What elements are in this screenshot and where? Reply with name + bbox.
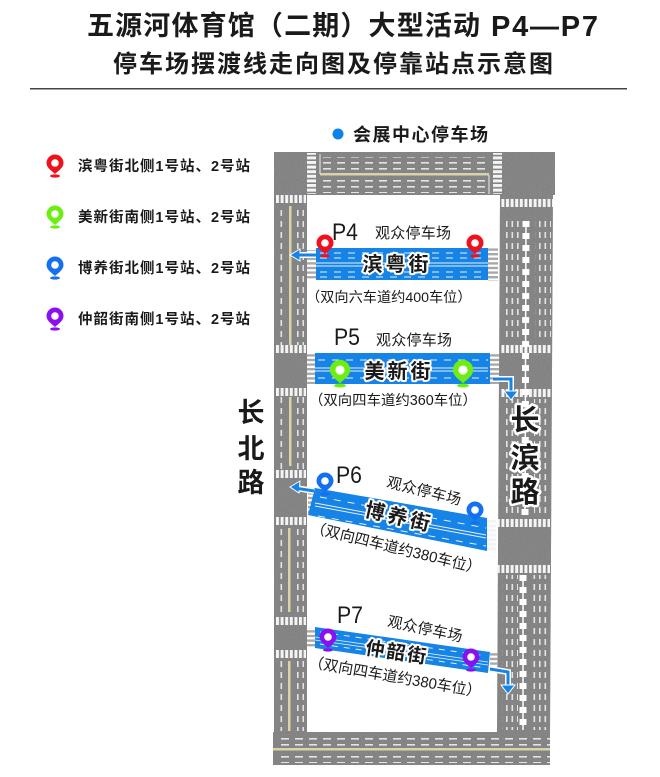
label: P5 capacity: （双向四车道约360车位） <box>309 392 477 409</box>
pin: P7 station 2 <box>462 648 480 672</box>
left road crosswalks <box>275 195 306 658</box>
street: 美新街 P5 <box>307 353 499 384</box>
street name: 美新街: 美新街 <box>364 360 434 383</box>
street name: 仲韶街: 仲韶街 <box>364 637 430 669</box>
legend item: green stop: 美新街南侧1号站、2号站 <box>78 208 250 226</box>
right road crosswalks <box>498 199 553 573</box>
street name: 滨粤街: 滨粤街 <box>362 252 432 276</box>
pin: P7 station 1 <box>320 628 336 652</box>
pin: P6 station 2 <box>466 502 484 525</box>
legend: stops <box>46 154 250 331</box>
bottom road markings <box>275 737 550 746</box>
legend item: purple stop <box>46 308 250 331</box>
pin: P6 station 1 <box>316 472 334 496</box>
label: P5: P5 <box>334 324 360 351</box>
title: main heading: P4—P7 <box>491 11 598 43</box>
street: 博养街 P6 <box>308 488 496 551</box>
road surfaces <box>273 152 555 765</box>
legend item: green stop <box>46 206 250 229</box>
left road lane markings <box>278 205 304 731</box>
arrow: P7 to 长滨路 <box>490 669 515 694</box>
legend item: purple stop: 仲韶街南侧1号站、2号站 <box>78 310 250 328</box>
road network <box>273 152 555 765</box>
legend item: red stop: 滨粤街北侧1号站、2号站 <box>78 157 250 175</box>
road name: 长北路: 路 <box>238 468 264 498</box>
right road lane markings <box>502 216 551 730</box>
title: main heading: 五源河体育馆（二期）大型活动 <box>87 11 480 41</box>
arrow: P5 to 长滨路 <box>493 379 518 400</box>
arrow: P4 westbound <box>290 249 316 261</box>
label: P5 spectator parking: 观众停车场 <box>376 332 452 349</box>
label: P4 capacity: （双向六车道约400车位） <box>306 289 472 306</box>
label: P6: P6 <box>336 462 362 489</box>
stop pins on map <box>316 234 484 672</box>
subtitle: 停车场摆渡线走向图及停靠站点示意图 <box>113 50 553 78</box>
pin: P5 station 2 <box>453 360 473 388</box>
pin: P5 station 1 <box>330 360 350 388</box>
road name: 长滨路: 路 <box>510 476 540 509</box>
label: P4: P4 <box>332 219 358 246</box>
street: 滨粤街 P4 <box>307 248 498 281</box>
road name: 长滨路: 长 <box>510 404 540 437</box>
pin: P4 station 1 <box>316 234 334 258</box>
road name: 长滨路: 滨 <box>510 442 540 475</box>
label: P6 capacity: （双向四车道约380车位） <box>309 519 483 578</box>
road name: 长北路: 北 <box>238 434 264 464</box>
arrow: P6 westbound <box>290 481 314 493</box>
street name: 博养街: 博养街 <box>363 498 435 536</box>
label: P6 spectator parking: 观众停车场 <box>385 474 463 509</box>
pin: P4 station 2 <box>466 234 484 258</box>
label: P7: P7 <box>337 602 363 629</box>
label: P7 capacity: （双向四车道约380车位） <box>307 654 483 701</box>
label: P4 spectator parking: 观众停车场 <box>375 225 451 242</box>
legend item: red stop <box>46 154 250 178</box>
label: P7 spectator parking: 观众停车场 <box>386 613 464 646</box>
street: 仲韶街 P7 <box>307 627 498 673</box>
venue label: exhibition centre car park: 会展中心停车场 <box>353 124 488 145</box>
road name: 长北路: 长 <box>238 398 264 428</box>
legend item: blue stop: 博养街北侧1号站、2号站 <box>78 259 250 277</box>
top road markings <box>320 157 489 170</box>
road name: 长滨路 <box>510 404 540 509</box>
legend item: blue stop <box>46 256 250 280</box>
right road dashed white centre line <box>523 221 526 730</box>
road name: 长北路 <box>238 398 264 498</box>
